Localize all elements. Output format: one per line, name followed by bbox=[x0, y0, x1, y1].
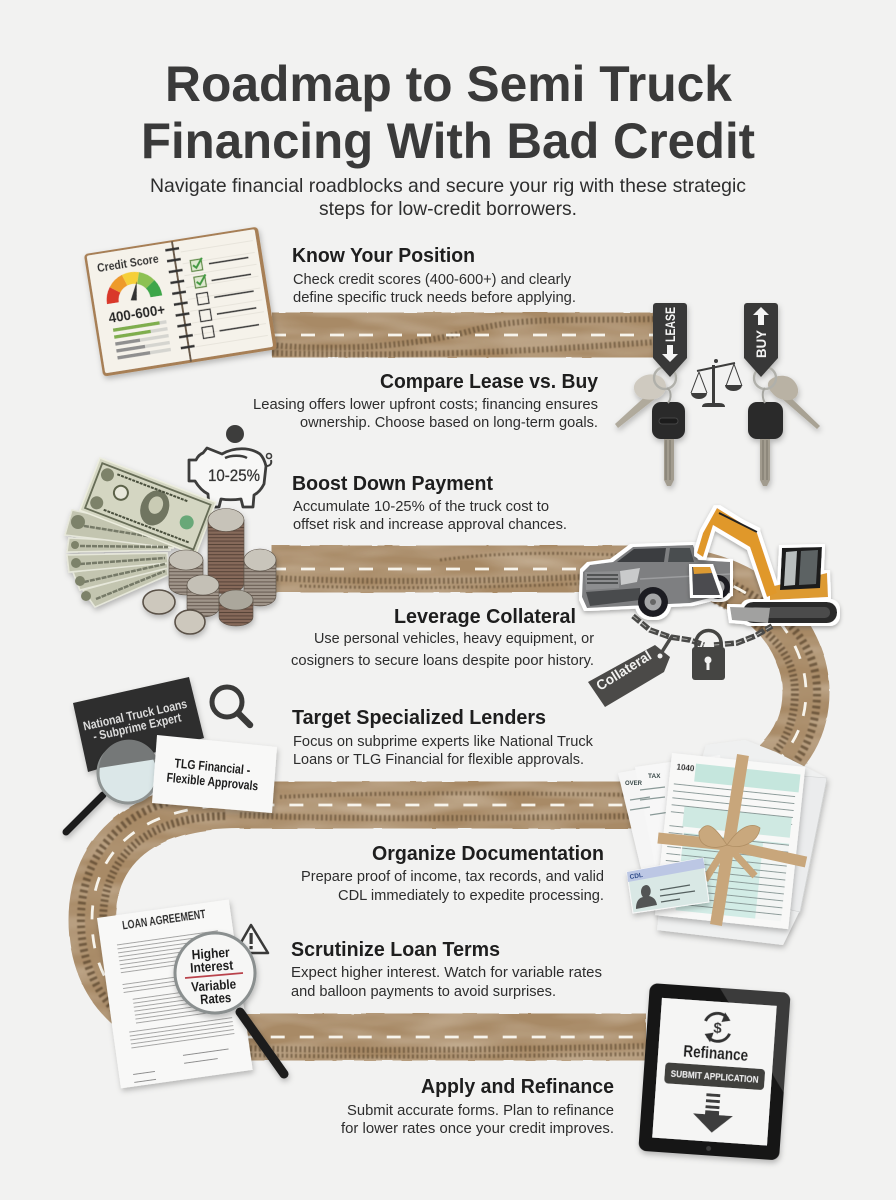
body text: Expect higher interest. Watch for variable rates bbox=[291, 965, 602, 981]
body text: Use personal vehicles, heavy equipment, or bbox=[314, 631, 594, 647]
icon: loan agreement with magnifier bbox=[97, 899, 284, 1088]
top bill bbox=[80, 458, 216, 555]
refinance icon bbox=[704, 1011, 731, 1044]
collateral tag bbox=[588, 645, 670, 707]
icon: tablet bbox=[638, 983, 791, 1160]
magnifying glass bbox=[175, 933, 284, 1074]
tread marks on straights bbox=[205, 319, 655, 1057]
body text: and balloon payments to avoid surprises. bbox=[291, 984, 556, 1000]
dark card: - Subprime Expert bbox=[92, 710, 183, 744]
body text: Loans or TLG Financial for flexible approvals. bbox=[293, 752, 584, 768]
refinance icon: $ bbox=[713, 1020, 723, 1037]
warning triangle bbox=[235, 925, 268, 953]
body text bbox=[293, 272, 576, 306]
download arrow bbox=[692, 1092, 734, 1134]
step 2: compare lease vs buy bbox=[253, 371, 599, 431]
magnifier lens bbox=[66, 740, 158, 832]
white card: Flexible Approvals bbox=[166, 770, 259, 793]
icon: pickup truck bbox=[582, 545, 730, 617]
loan document bbox=[97, 899, 253, 1088]
icon: excavator bbox=[692, 508, 837, 623]
magnifying glass: Higher bbox=[191, 945, 231, 962]
heading: Boost Down Payment bbox=[292, 473, 493, 495]
body text bbox=[291, 965, 602, 1000]
ribbon bbox=[658, 755, 806, 925]
step 3: boost down payment bbox=[292, 473, 567, 533]
body text bbox=[301, 869, 604, 904]
step 8: apply and refinance bbox=[341, 1076, 614, 1137]
icon: lease key bbox=[615, 303, 687, 486]
id card: CDL bbox=[629, 872, 644, 881]
body text: offset risk and increase approval chances. bbox=[293, 517, 567, 533]
heading: Organize Documentation bbox=[372, 843, 604, 865]
checklist bbox=[190, 251, 260, 339]
body text: ownership. Choose based on long-term goals. bbox=[300, 415, 598, 431]
body text bbox=[293, 499, 567, 533]
small magnifier icon bbox=[212, 687, 250, 725]
magnifying glass: Rates bbox=[200, 990, 232, 1007]
winding road bbox=[92, 319, 806, 1057]
magnifying glass: Interest bbox=[190, 957, 234, 975]
credit gauge bbox=[109, 275, 157, 304]
body text: Submit accurate forms. Plan to refinance bbox=[347, 1103, 614, 1119]
icon: credit score notebook: 400-600+ bbox=[107, 301, 167, 327]
step 7: scrutinize loan terms bbox=[291, 939, 602, 1000]
body text: Focus on subprime experts like National Truck bbox=[293, 734, 594, 750]
dark card bbox=[73, 677, 204, 772]
title: Roadmap to Semi Truck bbox=[165, 56, 732, 112]
dark card: National Truck Loans bbox=[82, 697, 188, 733]
icon: tax documents with ribbon: TAX bbox=[648, 773, 661, 780]
subtitle: Navigate financial roadblocks and secure your rig with these strategic bbox=[150, 175, 746, 197]
step 4: leverage collateral bbox=[291, 606, 594, 669]
chain bbox=[633, 616, 772, 655]
heading: Leverage Collateral bbox=[394, 606, 576, 628]
icon: lender cards and magnifier bbox=[66, 677, 277, 832]
step 6: organize documentation bbox=[301, 843, 604, 904]
main form bbox=[655, 753, 805, 929]
body text bbox=[293, 734, 594, 768]
icon: buy key bbox=[744, 303, 820, 486]
icon: tax documents with ribbon: OVER bbox=[625, 781, 643, 787]
body text bbox=[291, 631, 594, 669]
body text: Prepare proof of income, tax records, and valid bbox=[301, 869, 604, 885]
lease tag: LEASE bbox=[663, 307, 678, 342]
body text: Accumulate 10-25% of the truck cost to bbox=[293, 499, 549, 515]
body text: define specific truck needs before applying. bbox=[293, 290, 576, 306]
icon: cash and coins bbox=[65, 458, 276, 634]
body text: for lower rates once your credit improves. bbox=[341, 1121, 614, 1137]
submit application button: SUBMIT APPLICATION bbox=[670, 1069, 759, 1086]
heading: Scrutinize Loan Terms bbox=[291, 939, 500, 961]
padlock bbox=[692, 630, 725, 680]
icon: balance scale bbox=[691, 359, 742, 407]
icon: tablet: Refinance bbox=[683, 1042, 749, 1065]
body text bbox=[341, 1103, 614, 1137]
collateral chain and lock bbox=[588, 616, 772, 707]
coin stacks bbox=[143, 508, 276, 634]
id card bbox=[627, 858, 709, 913]
main form: 1040 bbox=[676, 763, 695, 773]
body text: Check credit scores (400-600+) and clearly bbox=[293, 272, 572, 288]
step 5: target specialized lenders bbox=[292, 707, 594, 768]
white card bbox=[152, 735, 277, 813]
title: Financing With Bad Credit bbox=[141, 113, 755, 169]
buy tag: BUY bbox=[754, 330, 769, 358]
tread marks on curves bbox=[92, 590, 806, 1037]
icon: piggy bank bbox=[189, 425, 272, 507]
icon: credit score notebook bbox=[84, 227, 277, 377]
title bbox=[141, 56, 755, 169]
fanned dollar bills bbox=[65, 458, 216, 607]
icon: tax documents with ribbon bbox=[618, 740, 827, 945]
icon: piggy bank: 10-25% bbox=[208, 467, 260, 485]
heading: Compare Lease vs. Buy bbox=[380, 371, 599, 393]
centre line bbox=[92, 335, 806, 1037]
lease tag bbox=[653, 303, 687, 377]
body text bbox=[253, 397, 598, 431]
loan document: LOAN AGREEMENT bbox=[121, 907, 207, 932]
collateral tag: Collateral bbox=[593, 647, 654, 694]
icon: credit score notebook: Credit Score bbox=[96, 254, 160, 275]
white card: TLG Financial - bbox=[174, 755, 251, 778]
submit application button bbox=[664, 1062, 765, 1090]
heading: Know Your Position bbox=[292, 245, 475, 267]
heading: Apply and Refinance bbox=[421, 1076, 614, 1098]
body text: cosigners to secure loans despite poor history. bbox=[291, 653, 594, 669]
buy tag bbox=[744, 303, 778, 377]
body text: Leasing offers lower upfront costs; financing ensures bbox=[253, 397, 598, 413]
magnifying glass: Variable bbox=[191, 976, 237, 995]
heading: Target Specialized Lenders bbox=[292, 707, 546, 729]
body text: CDL immediately to expedite processing. bbox=[338, 888, 604, 904]
step 1: know your position bbox=[292, 245, 576, 306]
subtitle: steps for low-credit borrowers. bbox=[319, 198, 577, 220]
subtitle bbox=[150, 175, 746, 220]
